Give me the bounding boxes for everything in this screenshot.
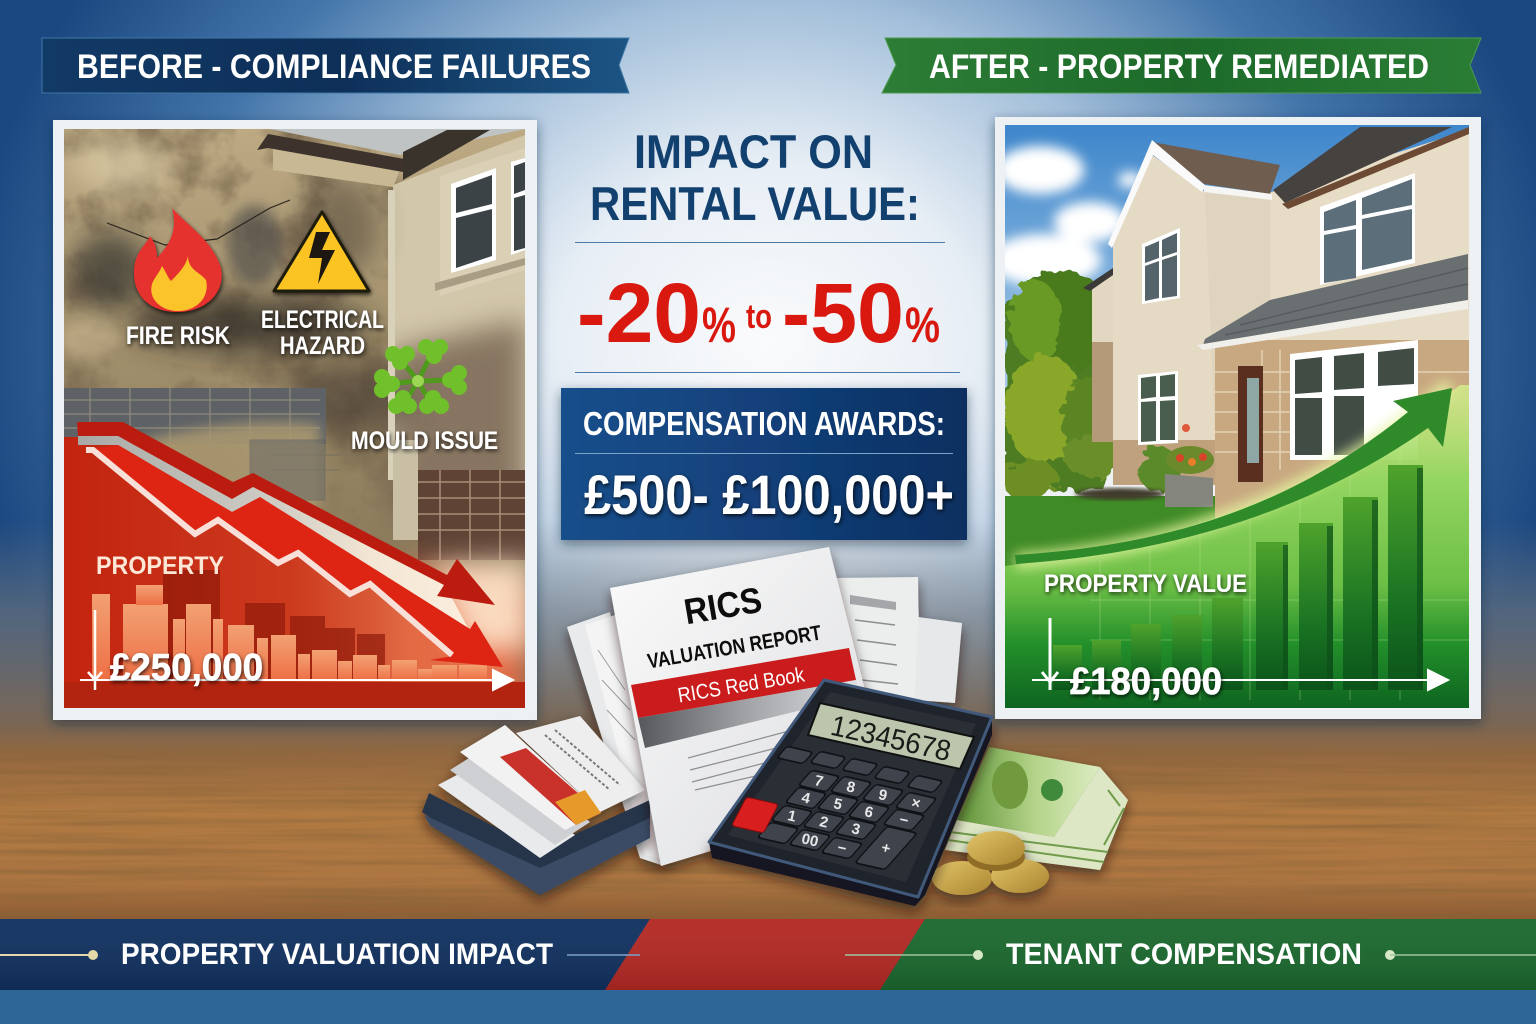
calculator key labels: 7 bbox=[813, 772, 825, 791]
dark bars bbox=[163, 570, 385, 680]
value: 250,000: £250,000 bbox=[110, 647, 263, 689]
rental impact figures bbox=[577, 266, 940, 360]
drain pipe bbox=[388, 190, 395, 480]
compensation amount: £500- £100,000+ bbox=[584, 463, 954, 526]
stone lower wall bbox=[1215, 340, 1469, 520]
compensation box bbox=[561, 388, 967, 540]
bar side shading bbox=[1283, 468, 1423, 690]
calculator key labels: + bbox=[880, 839, 892, 858]
calculator keys bbox=[757, 746, 943, 870]
axis arrow, vertical bbox=[88, 610, 102, 690]
axis arrow, horizontal bbox=[80, 670, 513, 690]
crack bbox=[107, 200, 290, 245]
calculator key labels: 6 bbox=[863, 803, 875, 822]
green chart background bbox=[1005, 385, 1469, 708]
label: mould issue: MOULD ISSUE bbox=[351, 427, 498, 455]
calculator key labels bbox=[786, 772, 922, 858]
lawn bbox=[1005, 496, 1215, 566]
calculator key labels: 1 bbox=[786, 807, 798, 826]
calculator key labels: 5 bbox=[832, 795, 844, 814]
dark roof edge bbox=[403, 130, 490, 180]
report band label: RICS Red Book bbox=[676, 663, 807, 708]
right roof bbox=[1273, 127, 1452, 203]
compensation heading: COMPENSATION AWARDS: bbox=[583, 405, 945, 442]
right wing wall bbox=[1262, 130, 1469, 350]
trees bbox=[1005, 270, 1113, 496]
black stains bbox=[72, 232, 148, 308]
main red arrow bbox=[93, 445, 503, 667]
main gable wall bbox=[1113, 156, 1215, 440]
grey band bbox=[638, 680, 860, 748]
label: electrical hazard: HAZARD bbox=[280, 332, 365, 360]
shrubs bbox=[1138, 448, 1182, 492]
before banner bbox=[42, 38, 629, 93]
red chart background bbox=[64, 437, 420, 682]
panel: before, damaged property bbox=[53, 120, 537, 720]
label: property: PROPERTY bbox=[96, 552, 224, 580]
centre heading: RENTAL VALUE: bbox=[590, 177, 920, 230]
label: electrical hazard bbox=[261, 306, 384, 360]
back papers bbox=[567, 577, 962, 865]
upper dark arrow bbox=[77, 422, 495, 605]
report title: RICS bbox=[681, 579, 765, 632]
rental impact figures: % bbox=[702, 297, 736, 353]
left wing bbox=[1092, 275, 1113, 342]
after banner bbox=[882, 38, 1481, 93]
calculator key labels: 9 bbox=[877, 786, 889, 805]
bay window bbox=[1290, 340, 1418, 460]
centre heading: IMPACT ON bbox=[634, 125, 873, 178]
rental impact figures: % bbox=[905, 297, 940, 353]
rental impact figures: to bbox=[746, 298, 772, 336]
lower window bbox=[1138, 371, 1178, 445]
centre heading bbox=[590, 125, 920, 230]
clouds bbox=[989, 146, 1142, 286]
calculator key labels: 3 bbox=[850, 820, 862, 839]
calculator key labels: 2 bbox=[818, 813, 830, 832]
desk objects bbox=[422, 547, 1128, 906]
coins bbox=[932, 831, 1049, 895]
gable eave bbox=[1108, 140, 1206, 248]
icon: electrical hazard bbox=[274, 212, 369, 291]
axis arrow, horizontal bbox=[1032, 670, 1448, 690]
report subtitle: VALUATION REPORT bbox=[646, 621, 823, 673]
label: fire risk: FIRE RISK bbox=[126, 322, 230, 350]
calculator key labels: 00 bbox=[800, 830, 820, 851]
grey brick band bbox=[64, 388, 340, 520]
brick, lower right bbox=[418, 470, 525, 560]
soffit and gutter bbox=[273, 147, 403, 187]
peach bars bbox=[92, 585, 487, 680]
rental impact figures: -50 bbox=[782, 266, 904, 360]
axis arrow, vertical bbox=[1042, 618, 1058, 690]
bottom ribbon bbox=[0, 919, 1536, 990]
calculator key labels: 4 bbox=[800, 789, 813, 808]
strip between arrows bbox=[78, 430, 470, 632]
cream side wall bbox=[393, 135, 525, 480]
white zig-zag line bbox=[86, 450, 452, 655]
upper left window bbox=[1142, 228, 1180, 304]
main report bbox=[610, 547, 880, 866]
calculator display digits: 12345678 bbox=[828, 710, 954, 768]
window bbox=[435, 148, 525, 296]
wooden tabletop bbox=[0, 725, 1536, 921]
sky bbox=[270, 129, 525, 155]
label: property value: PROPERTY VALUE bbox=[1044, 570, 1247, 598]
after banner title: AFTER - PROPERTY REMEDIATED bbox=[929, 48, 1429, 86]
binder bbox=[422, 716, 650, 895]
flower bed bbox=[1075, 488, 1165, 500]
calculator screen bbox=[808, 703, 974, 769]
green bars bbox=[1053, 465, 1423, 690]
porch roof bbox=[1203, 254, 1468, 345]
sky bbox=[1005, 125, 1469, 425]
flower planter bbox=[1165, 424, 1214, 507]
rental impact figures: -20 bbox=[577, 266, 701, 360]
gable roof bbox=[1152, 142, 1280, 194]
calculator key labels: − bbox=[836, 839, 848, 858]
door bbox=[1238, 366, 1263, 482]
green arrow bbox=[1015, 388, 1452, 564]
bottom label: property valuation impact: PROPERTY VALUATION IMPACT bbox=[121, 938, 553, 971]
icon: mould bbox=[374, 339, 467, 414]
icon: fire bbox=[134, 208, 222, 312]
before banner title: BEFORE - COMPLIANCE FAILURES bbox=[77, 48, 591, 86]
value: 180,000: £180,000 bbox=[1070, 661, 1222, 703]
bottom label: tenant compensation: TENANT COMPENSATION bbox=[1006, 938, 1362, 971]
red bank card bbox=[500, 748, 601, 825]
panel: after, remediated property bbox=[989, 117, 1481, 719]
label: electrical hazard: ELECTRICAL bbox=[261, 306, 384, 334]
banknotes bbox=[945, 747, 1128, 870]
red band bbox=[631, 648, 856, 718]
calculator key labels: × bbox=[910, 794, 922, 813]
calculator key labels: 8 bbox=[845, 778, 857, 797]
footer strip bbox=[0, 990, 1536, 1024]
calculator bbox=[709, 680, 992, 906]
calculator key labels: − bbox=[898, 811, 910, 830]
upper right window bbox=[1320, 173, 1415, 285]
calculator red key bbox=[732, 797, 778, 833]
